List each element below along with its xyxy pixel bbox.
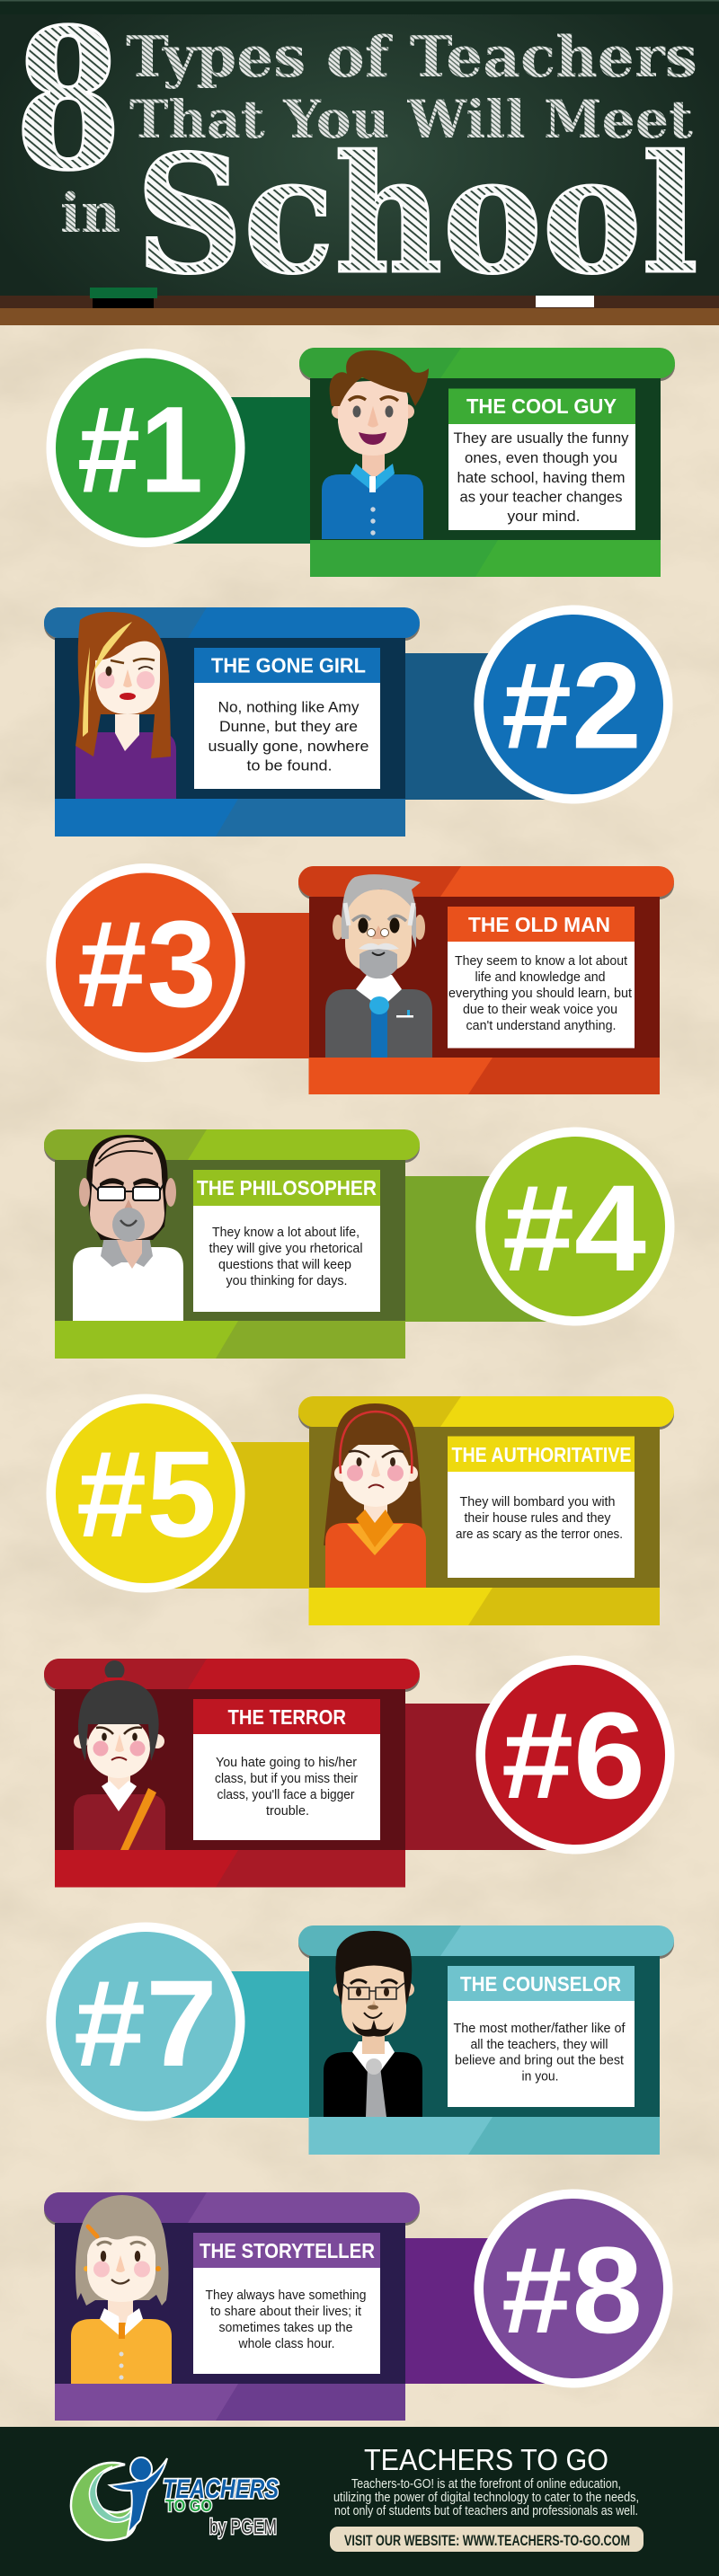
teacher portrait	[75, 612, 176, 799]
text card	[193, 1170, 380, 1312]
number badge: #6	[502, 1687, 645, 1825]
teacher portrait	[324, 1403, 426, 1588]
text card: all the teachers, they will	[471, 2037, 608, 2052]
board frame	[299, 348, 675, 540]
text card: hate school, having them	[457, 469, 626, 486]
text card: THE TERROR	[228, 1705, 346, 1729]
website button	[330, 2527, 644, 2552]
text card	[448, 388, 635, 530]
board frame	[44, 2192, 420, 2384]
text card: Dunne, but they are	[219, 718, 358, 735]
footer background	[0, 2427, 719, 2576]
number badge	[47, 1923, 244, 2120]
band	[146, 913, 316, 1058]
number badge: #5	[76, 1426, 217, 1563]
text card: to be found.	[246, 757, 333, 775]
footer description: Teachers-to-GO! is at the forefront of online education,	[351, 2476, 621, 2492]
footer description	[333, 2476, 639, 2518]
teacher portrait	[73, 1135, 183, 1321]
top frame	[0, 0, 719, 14]
number badge: #3	[77, 896, 217, 1033]
teacher portrait	[324, 1931, 422, 2117]
text card: believe and bring out the best	[455, 2052, 625, 2068]
icon: chalk	[536, 296, 594, 307]
text card: questions that will keep	[218, 1257, 351, 1272]
band	[400, 1176, 575, 1322]
chalk ledge	[0, 296, 719, 325]
board ledge	[55, 2384, 405, 2421]
number badge	[476, 1127, 674, 1326]
board frame	[298, 1396, 674, 1588]
board ledge	[309, 1588, 660, 1625]
footer description: not only of students but of teachers and professionals as well.	[334, 2503, 638, 2518]
icon: eraser	[90, 288, 157, 308]
panel: #7 the counselor	[47, 1923, 674, 2155]
board ledge	[55, 1321, 405, 1359]
text card: class, you'll face a bigger	[217, 1787, 354, 1802]
text card	[448, 907, 635, 1048]
title: in	[60, 182, 120, 245]
text card: as your teacher changes	[460, 489, 622, 505]
number badge	[476, 1655, 674, 1855]
teacher portrait	[325, 874, 432, 1058]
title: Types of Teachers	[126, 23, 697, 90]
logo: Teachers to Go by PGEM: TEACHERS	[163, 2474, 279, 2504]
board frame	[298, 866, 674, 1058]
board frame	[44, 607, 420, 800]
text card: The most mother/father like of	[453, 2021, 626, 2036]
text card: in you.	[521, 2068, 559, 2085]
board ledge	[309, 1058, 660, 1094]
text card	[194, 648, 380, 789]
number badge: #4	[502, 1160, 646, 1297]
text card	[193, 2233, 380, 2374]
board ledge	[55, 1850, 405, 1887]
panel: #3 the old man	[47, 863, 674, 1094]
text card	[448, 1966, 635, 2107]
logo: Teachers to Go by PGEM: TO GO	[165, 2497, 212, 2515]
website button: VISIT OUR WEBSITE: WWW.TEACHERS-TO-GO.COM	[344, 2532, 630, 2549]
text card: their house rules and they	[464, 1510, 611, 1526]
board ledge	[309, 2117, 660, 2155]
text card: They know a lot about life,	[212, 1225, 360, 1240]
text card: can't understand anything.	[466, 1018, 617, 1033]
text card: THE COUNSELOR	[460, 1972, 621, 1996]
footer heading: TEACHERS TO GO	[364, 2443, 608, 2476]
panel: #2 the gone girl	[44, 606, 672, 837]
text card: They will bombard you with	[460, 1494, 615, 1509]
text card: They always have something	[205, 2288, 367, 2303]
logo: Teachers to Go by PGEM: by PGEM	[209, 2515, 277, 2538]
text card: They seem to know a lot about	[455, 953, 628, 969]
text card: whole class hour.	[238, 2336, 334, 2351]
logo: Teachers to Go by PGEM	[71, 2457, 279, 2540]
teacher portrait	[74, 1660, 165, 1850]
number badge: #1	[77, 381, 203, 519]
number badge	[475, 2189, 672, 2388]
text card: class, but if you miss their	[215, 1771, 358, 1786]
number badge: #7	[74, 1955, 217, 2093]
text card: They are usually the funny	[453, 429, 629, 447]
text card: you thinking for days.	[226, 1273, 347, 1288]
board frame	[44, 1129, 420, 1321]
text card: life and knowledge and	[475, 969, 606, 985]
teacher portrait	[322, 350, 429, 539]
text card: usually gone, nowhere	[209, 738, 368, 755]
text card: THE OLD MAN	[468, 913, 610, 936]
number badge: #8	[502, 2222, 643, 2359]
blackboard header	[0, 0, 719, 325]
text card	[448, 1436, 635, 1578]
panel: #8 the storyteller	[44, 2189, 672, 2421]
text card: to share about their lives; it	[210, 2304, 362, 2319]
panel: #4 the philosopher	[44, 1127, 674, 1359]
text card: THE AUTHORITATIVE	[451, 1443, 631, 1466]
number badge	[47, 349, 244, 547]
text card: You hate going to his/her	[216, 1755, 357, 1770]
text card: sometimes takes up the	[219, 2320, 352, 2335]
footer description: utilizing the power of digital technology to cater to the needs,	[333, 2490, 639, 2505]
text card: are as scary as the terror ones.	[456, 1527, 623, 1542]
band	[146, 1442, 316, 1589]
number badge	[47, 1394, 244, 1592]
band	[400, 1704, 575, 1850]
board ledge	[310, 540, 661, 577]
band	[146, 1971, 316, 2118]
text card: they will give you rhetorical	[209, 1241, 363, 1256]
text card: due to their weak voice you	[463, 1002, 617, 1017]
number badge	[475, 606, 672, 803]
panel: #6 the terror	[44, 1655, 674, 1887]
text card: your mind.	[507, 508, 581, 525]
text card: ones, even though you	[465, 449, 617, 466]
panel: #1 the cool guy	[47, 348, 675, 577]
chalkboard surface	[0, 0, 719, 296]
board frame	[44, 1659, 420, 1850]
band	[400, 2238, 575, 2384]
text card: THE PHILOSOPHER	[197, 1176, 377, 1199]
text card	[193, 1699, 380, 1840]
text card: trouble.	[266, 1803, 309, 1819]
text card: THE GONE GIRL	[211, 654, 366, 677]
panel: #5 the authoritative	[47, 1394, 674, 1625]
text card: everything you should learn, but	[448, 986, 633, 1001]
title	[15, 0, 698, 310]
board ledge	[55, 799, 405, 837]
title: That You Will Meet	[129, 89, 693, 150]
board frame	[298, 1925, 674, 2117]
text card: No, nothing like Amy	[217, 699, 360, 715]
band	[146, 397, 316, 544]
teacher portrait	[71, 2195, 172, 2384]
text card: THE COOL GUY	[466, 394, 617, 418]
footer	[0, 2427, 719, 2576]
band	[400, 653, 575, 800]
text card: THE STORYTELLER	[200, 2239, 375, 2262]
number badge: #2	[502, 638, 642, 775]
number badge	[47, 863, 244, 1062]
